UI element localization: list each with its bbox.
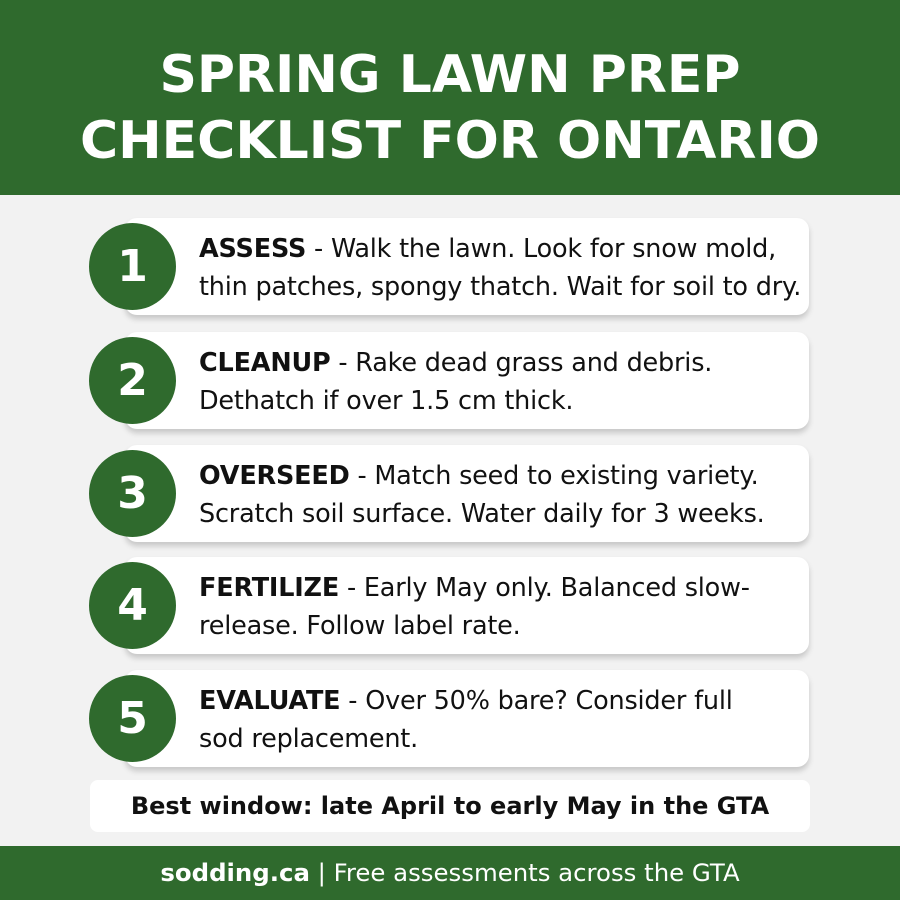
icon: number 2 — [89, 337, 176, 424]
title: SPRING LAWN PREP — [159, 45, 741, 105]
icon: number 1 — [89, 223, 176, 310]
text: cleanup: CLEANUP - Rake dead grass and debris. — [199, 348, 712, 378]
icon: number 3 — [89, 450, 176, 537]
card: step 4 fertilize — [125, 557, 809, 654]
footer: sodding.ca | Free assessments across the GTA — [160, 858, 740, 887]
icon: number 2: 2 — [117, 355, 148, 406]
title: CHECKLIST FOR ONTARIO — [80, 111, 820, 171]
text: evaluate: EVALUATE - Over 50% bare? Consider full — [199, 686, 733, 716]
icon: number 1: 1 — [117, 241, 148, 292]
card: step 2 cleanup — [125, 332, 809, 429]
card: step 3 overseed — [125, 445, 809, 542]
text: fertilize: release. Follow label rate. — [199, 611, 521, 641]
text: cleanup: Dethatch if over 1.5 cm thick. — [199, 386, 573, 416]
icon: number 5 — [89, 675, 176, 762]
footer — [0, 846, 900, 900]
text: assess: ASSESS - Walk the lawn. Look for snow mold, — [199, 234, 776, 264]
callout: best window — [90, 780, 810, 832]
title — [0, 0, 900, 195]
callout: best window: Best window: late April to early May in the GTA — [131, 792, 769, 820]
icon: number 4: 4 — [117, 580, 148, 631]
text: fertilize — [199, 573, 750, 641]
text: overseed: Scratch soil surface. Water daily for 3 weeks. — [199, 499, 765, 529]
text: assess: thin patches, spongy thatch. Wait for soil to dry. — [199, 272, 801, 302]
text: overseed — [199, 461, 765, 529]
text: evaluate — [199, 686, 733, 754]
text: cleanup — [199, 348, 712, 416]
icon: number 4 — [89, 562, 176, 649]
card: step 1 assess — [125, 218, 809, 315]
icon: number 3: 3 — [117, 468, 148, 519]
icon: number 5: 5 — [117, 693, 148, 744]
text: evaluate: sod replacement. — [199, 724, 418, 754]
text: assess — [199, 234, 801, 302]
card: step 5 evaluate — [125, 670, 809, 767]
text: overseed: OVERSEED - Match seed to existing variety. — [199, 461, 759, 491]
text: fertilize: FERTILIZE - Early May only. Balanced slow- — [199, 573, 750, 603]
